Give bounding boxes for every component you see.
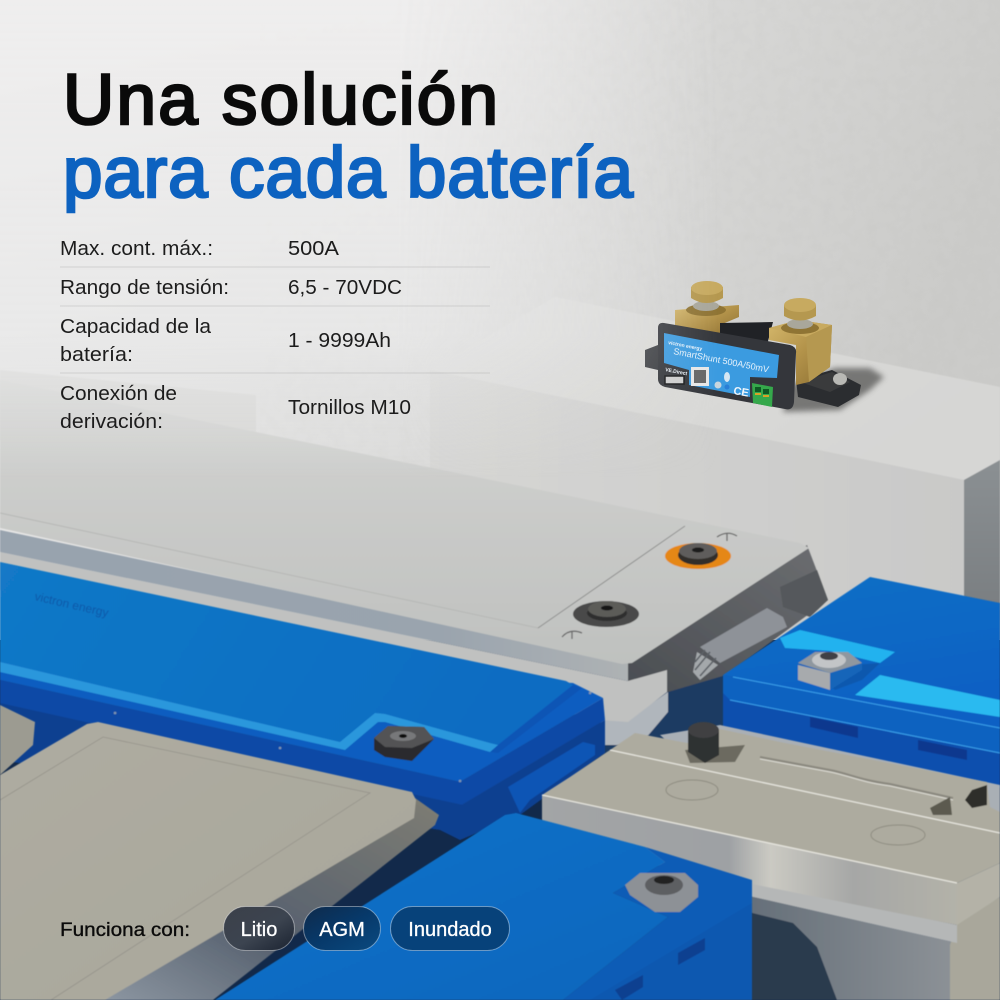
dark underside: [600, 670, 735, 760]
label text: SmartShunt 500A/50mV: [673, 346, 770, 374]
blue battery, right: [723, 577, 1000, 788]
pill: AGM: [304, 906, 380, 950]
row: voltage range: Rango de tensión:: [60, 277, 229, 299]
lid inner line: [0, 513, 538, 628]
hex terminal: [798, 652, 862, 690]
title line 1: Una solución: [63, 61, 498, 140]
row: shunt connection: Tornillos M10: [288, 397, 411, 419]
grey battery, long: [0, 380, 828, 760]
device shadow: [783, 368, 884, 412]
lower case: [723, 680, 1000, 788]
lower dark case: [0, 700, 605, 840]
positive terminal: [665, 543, 731, 569]
base lip: [100, 798, 439, 1000]
VE.Direct label: VE.Direct: [665, 367, 688, 377]
dark notches: [965, 785, 987, 808]
flange top: [563, 847, 752, 1000]
tan battery, front-left: [0, 722, 439, 1000]
hex terminal: [625, 873, 698, 912]
flange top: [0, 662, 603, 782]
front lip light strip: [0, 552, 667, 722]
shadow on side: [700, 900, 837, 1000]
front face: [542, 795, 957, 925]
row: battery capacity: 1 - 9999Ah: [288, 330, 391, 352]
row: battery capacity: batería:: [60, 344, 133, 366]
brass front block: [769, 320, 832, 385]
title: [63, 61, 634, 213]
mounting foot right: [796, 370, 861, 407]
pill: Inundado: Inundado: [408, 919, 492, 941]
battery top slot: [760, 757, 953, 798]
post shadow: [685, 745, 745, 763]
concrete wall background: [0, 0, 1000, 620]
CE mark: CE: [732, 385, 750, 400]
blue label: [664, 333, 779, 397]
QR code: [691, 367, 709, 386]
right dark side: [628, 545, 828, 692]
right corner face: [957, 863, 1000, 925]
concrete plinth: [0, 297, 1000, 640]
SmartShunt device: [645, 281, 884, 412]
row: max current: Max. cont. máx.:: [60, 238, 213, 260]
front lip slate band: [0, 530, 628, 681]
lid top: [0, 380, 809, 664]
row: max current: 500A: [288, 238, 340, 260]
pill: Litio: Litio: [241, 919, 277, 941]
embossed logo: victron energy: [33, 589, 110, 620]
shaded lower side: [700, 885, 957, 1000]
lid right edge: [490, 685, 582, 753]
compatibility row: [60, 906, 510, 950]
slots: [678, 938, 705, 965]
light strip front: [855, 675, 1000, 717]
pill: Litio: [224, 906, 294, 950]
polarity marks: [562, 533, 737, 639]
lid top: [542, 729, 1000, 883]
dark post: [688, 722, 719, 763]
side handle: [508, 742, 595, 813]
green terminal: [752, 383, 773, 407]
row: voltage range: 6,5 - 70VDC: [288, 277, 402, 299]
negative terminal: [573, 601, 639, 627]
compatibility label: Funciona con:: [60, 919, 190, 941]
recess at terminal: [810, 663, 880, 690]
lid front lip: [0, 662, 498, 752]
small grey battery, left: [0, 705, 35, 775]
screws: [115, 693, 590, 781]
tan battery, right: [542, 722, 1000, 1000]
front face: [585, 900, 752, 1000]
blue battery, centre: [0, 562, 605, 840]
light strip rear: [780, 630, 895, 663]
lower rim: [700, 870, 957, 943]
circular caps: [666, 780, 718, 800]
lid top: [215, 813, 668, 1000]
lid front edge: [723, 675, 1000, 753]
top-left fade over image: [0, 0, 701, 412]
row: shunt connection: Conexión de: [60, 383, 177, 405]
row: voltage range: [60, 277, 402, 299]
dark gaps under batteries: [0, 640, 1000, 1000]
flange front: [0, 680, 605, 805]
specifications table: [60, 238, 490, 433]
row: shunt connection: derivación:: [60, 411, 163, 433]
hex terminal: [374, 726, 434, 761]
lid highlight lines: [730, 677, 1000, 753]
blue battery, front: [215, 813, 752, 1000]
grey gap behind: [660, 725, 1000, 825]
row: battery capacity: [60, 316, 391, 366]
row: max current: [60, 238, 340, 260]
title line 2: para cada batería: [63, 134, 634, 213]
lid top: [0, 562, 573, 745]
row: battery capacity: Capacidad de la: [60, 316, 212, 338]
brand mark: victron energy: [668, 340, 703, 353]
pill: Inundado: [390, 906, 510, 950]
row: shunt connection: [60, 383, 411, 433]
VE.Direct port: [665, 376, 684, 384]
edge highlights: [542, 750, 1000, 883]
lid top: [0, 722, 416, 1000]
cable: [693, 608, 787, 680]
mounting foot left: [645, 345, 658, 370]
right side face: [950, 897, 1000, 1000]
pill: AGM: AGM: [319, 919, 365, 941]
lid top: [723, 577, 1000, 728]
lid inner line: [0, 737, 370, 1000]
device body: [658, 323, 796, 409]
slots: [810, 717, 858, 738]
front bolt: [781, 298, 819, 334]
rear bolt: [686, 281, 726, 316]
status LEDs: [714, 372, 730, 390]
brass rear block: [675, 305, 739, 336]
